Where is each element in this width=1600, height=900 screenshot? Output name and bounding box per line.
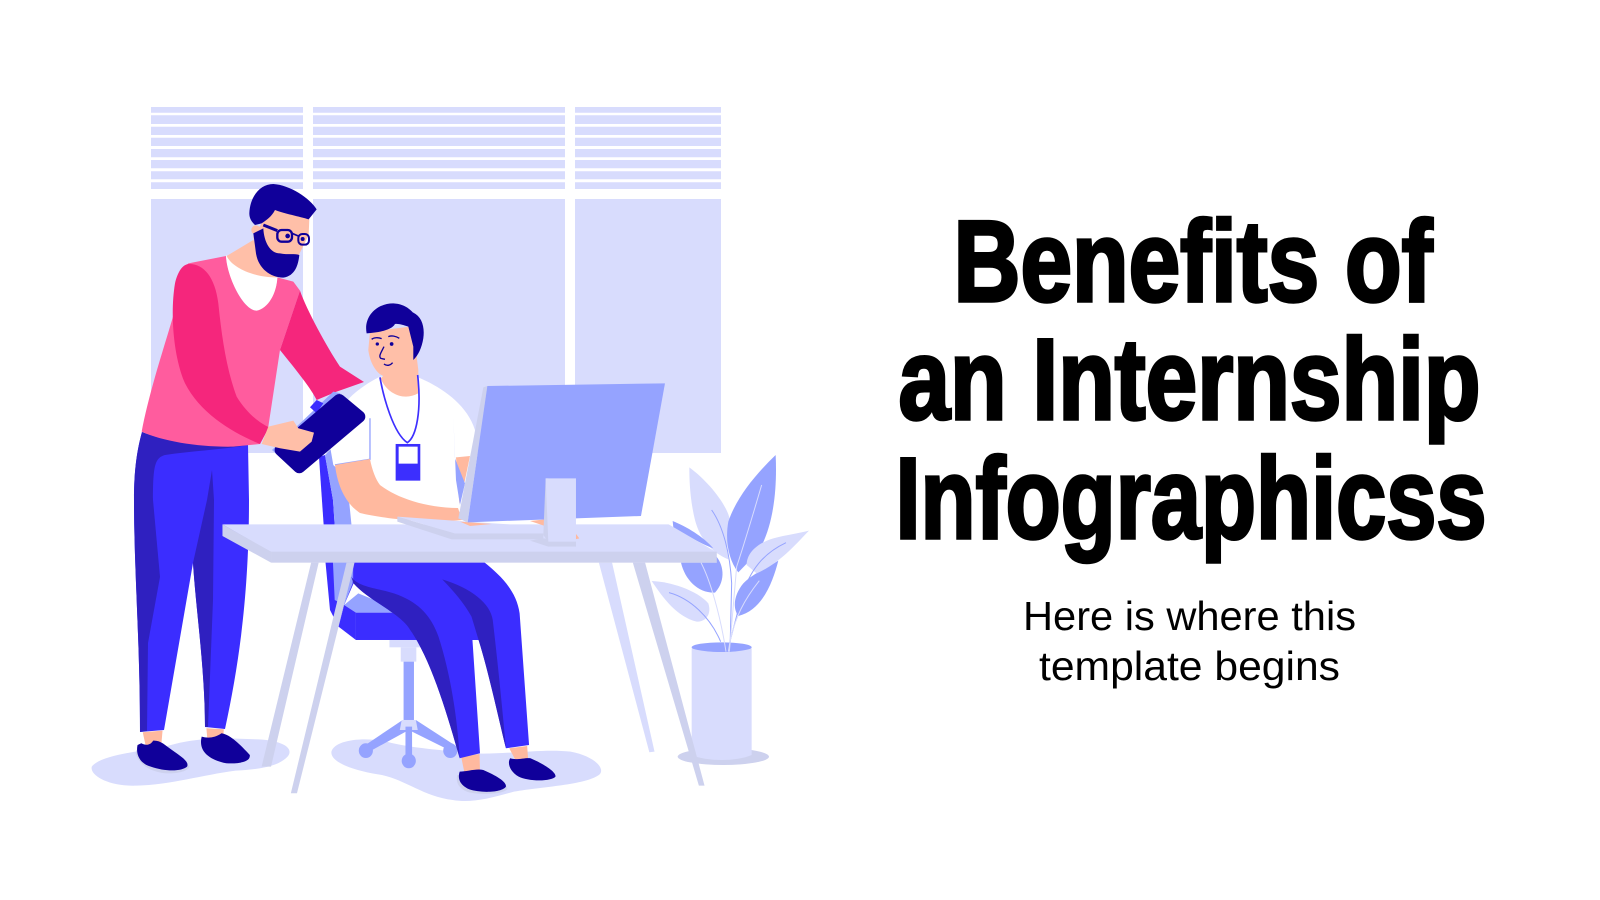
office chair <box>319 445 457 768</box>
chair seat and base <box>324 550 457 768</box>
subtitle: template begins <box>1039 643 1340 689</box>
floor shadows <box>92 738 601 801</box>
tablet <box>272 392 359 467</box>
chair back above desk <box>319 455 335 530</box>
intern arms <box>335 459 462 522</box>
mentor trousers and shoes <box>134 432 249 732</box>
desk <box>222 524 717 793</box>
intern torso and head <box>328 303 475 503</box>
subtitle: Here is where this <box>1023 593 1356 639</box>
title <box>896 198 1486 563</box>
standing mentor <box>134 184 364 773</box>
keyboard and computer monitor <box>397 383 665 547</box>
mentor torso and head <box>142 184 364 467</box>
seated intern <box>328 303 556 794</box>
potted plant <box>652 455 809 765</box>
intern legs and shoes <box>351 543 556 794</box>
subtitle <box>1023 593 1356 689</box>
window with blinds <box>151 107 721 453</box>
illustration: office scene <box>92 107 809 801</box>
title: an Internship <box>898 316 1480 444</box>
title: Benefits of <box>954 198 1433 326</box>
